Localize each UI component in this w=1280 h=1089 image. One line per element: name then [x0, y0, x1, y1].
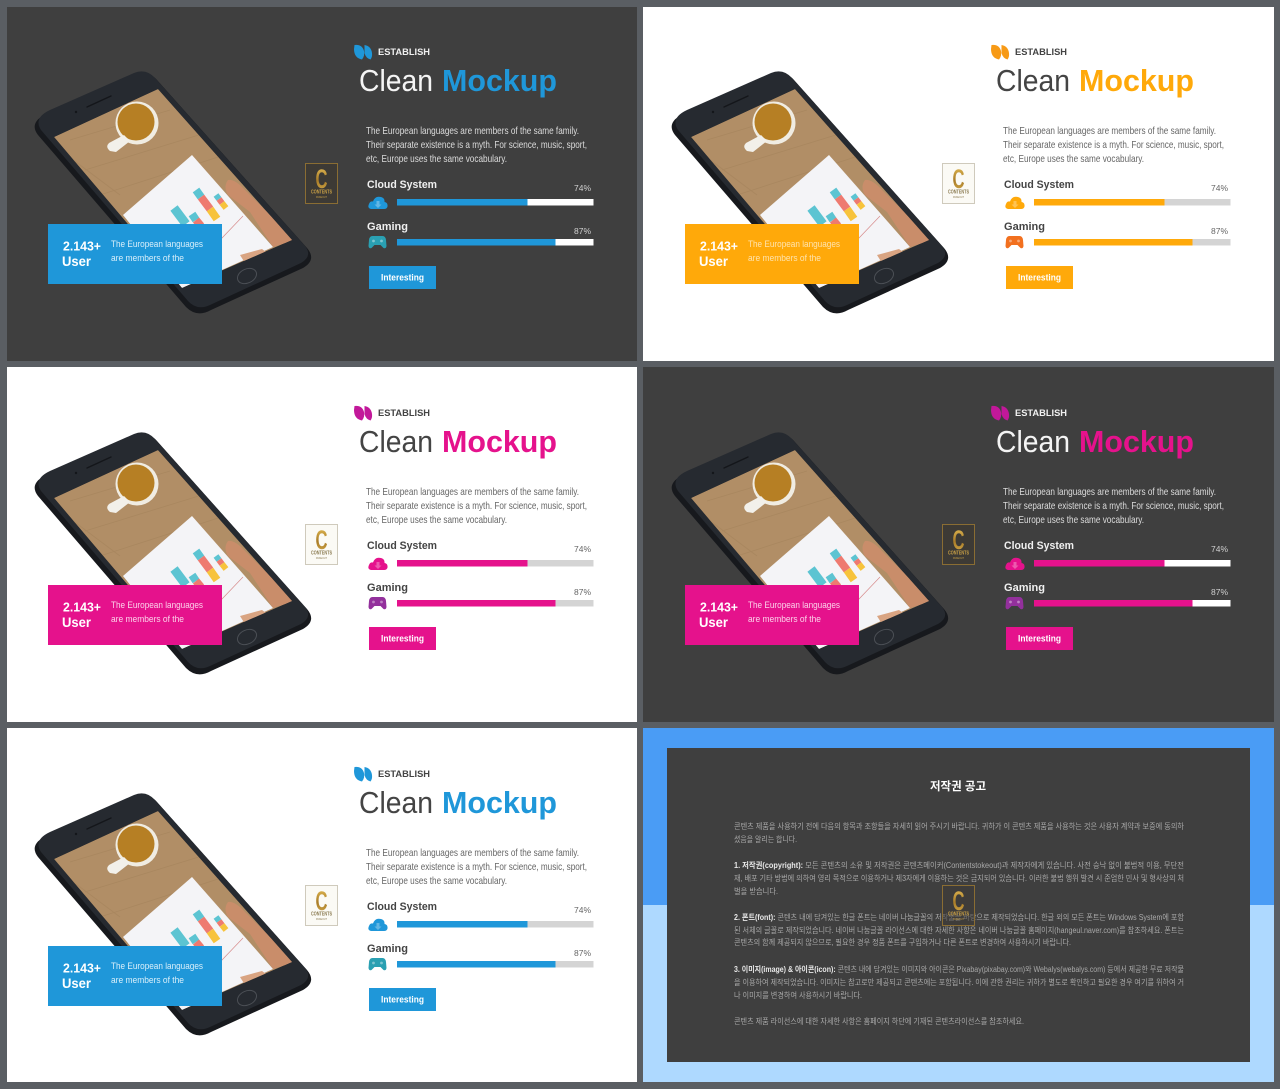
bar: cloud system: 74%	[574, 905, 591, 915]
logo badge: C	[316, 525, 328, 555]
bar: gaming: 87%	[574, 587, 591, 597]
bar: gaming: Gaming	[367, 221, 408, 233]
title	[359, 63, 557, 98]
logo badge: PAKEOUT	[953, 917, 964, 921]
stat card	[48, 224, 222, 284]
icon: leaf logo	[354, 406, 372, 420]
phone mockup	[672, 432, 948, 674]
bar: cloud system	[367, 901, 594, 931]
logo badge	[942, 164, 974, 204]
button	[369, 266, 436, 289]
paragraph: Their separate existence is a myth. For science, music, sport,	[1003, 501, 1224, 512]
bar: cloud system: Cloud System	[1004, 540, 1074, 552]
panel: slide 1 dark blue	[7, 7, 637, 361]
stat card: 2.143+	[700, 238, 738, 254]
logo badge: CONTENTS	[948, 190, 970, 196]
stat card: are members of the	[111, 974, 184, 985]
logo badge: CONTENTS	[311, 912, 333, 918]
title: Mockup	[442, 785, 557, 820]
notice intro: 콘텐츠 제품을 사용하기 전에 다음의 항목과 조항들을 자세히 읽어 주시기 바랍니다. 귀하가 이 콘텐츠 제품을 사용하는 것은 사용자 계약과 보증에 동의하	[734, 821, 1184, 831]
logo badge: PAKEOUT	[316, 917, 327, 921]
logo badge: C	[316, 164, 328, 194]
title	[359, 424, 557, 459]
bar: cloud system	[367, 540, 594, 570]
paragraph: Their separate existence is a myth. For science, music, sport,	[1003, 140, 1224, 151]
stat card: User	[62, 253, 92, 269]
title	[996, 63, 1194, 98]
bar: cloud system: Cloud System	[1004, 179, 1074, 191]
notice section 3: 을 이용하여 제작되었습니다. 이미지는 참고로만 제공되고 콘텐츠에는 포함됩니다. 이에 관한 권리는 귀하가 별도로 확인하고 필요한 경우 여기를 위하여 거	[734, 977, 1184, 987]
bar: gaming	[367, 221, 594, 248]
bar: cloud system	[367, 179, 594, 209]
stat card: The European languages	[748, 238, 840, 249]
title: Mockup	[1079, 63, 1194, 98]
notice section 1: 벌을 받습니다.	[734, 886, 778, 896]
title: Mockup	[442, 63, 557, 98]
panel: slide 4 dark magenta	[643, 367, 1274, 722]
eyebrow: ESTABLISH	[378, 47, 430, 58]
stat card: The European languages	[748, 599, 840, 610]
phone mockup	[35, 432, 311, 674]
logo badge	[306, 164, 338, 204]
stat card: 2.143+	[63, 600, 101, 614]
bar: cloud system: Cloud System	[367, 540, 437, 552]
bar: cloud system: 74%	[1211, 544, 1228, 554]
bar: cloud system: Cloud System	[367, 179, 437, 191]
logo badge: C	[952, 164, 964, 194]
phone mockup	[672, 71, 948, 313]
title: Mockup	[442, 424, 557, 459]
bar: cloud system	[1004, 540, 1230, 570]
paragraph: etc, Europe uses the same vocabulary.	[1003, 154, 1144, 165]
bar: gaming	[1004, 582, 1230, 609]
button: Interesting	[1018, 634, 1061, 644]
icon: leaf logo	[991, 45, 1009, 60]
paragraph: The European languages are members of the same family.	[366, 487, 579, 498]
paragraph	[366, 487, 587, 526]
logo badge: PAKEOUT	[953, 195, 964, 199]
logo badge: C	[316, 886, 328, 916]
notice section 1: 재, 배포 기타 방법에 의하여 영리 목적으로 이용하거나 제3자에게 이용하는 것은 금지되어 있습니다. 이러한 불법 행위 발견 시 준엄한 민사 및 형사상의 처	[734, 873, 1184, 883]
notice section 2: 된 서체의 글꼴로 제작되었습니다. 네이버 나눔글꼴 라이선스에 대한 자세한 사항은 네이버 나눔글꼴 홈페이지(hangeul.naver.com)를 참조하세요. 폰트는	[734, 925, 1184, 935]
button: Interesting	[381, 994, 424, 1004]
notice title: 저작권 공고	[930, 779, 986, 793]
stat card: 2.143+	[63, 960, 101, 976]
button: Interesting	[1018, 272, 1061, 282]
paragraph: etc, Europe uses the same vocabulary.	[366, 515, 507, 526]
logo badge: CONTENTS	[311, 190, 333, 196]
stat card: are members of the	[748, 613, 821, 624]
paragraph: Their separate existence is a myth. For science, music, sport,	[366, 862, 587, 873]
logo badge: C	[952, 886, 964, 916]
stat card: The European languages	[111, 238, 203, 249]
logo badge	[306, 524, 338, 564]
bar: cloud system: Cloud System	[367, 901, 437, 913]
stat card	[685, 585, 859, 645]
bar: gaming	[367, 943, 594, 970]
icon: leaf logo	[354, 45, 372, 60]
paragraph: Their separate existence is a myth. For science, music, sport,	[366, 501, 587, 512]
notice section 3: 3. 이미지(image) & 아이콘(icon): 콘텐츠 내에 담겨있는 이미지와 아이콘은 Pixabay(pixabay.com)와 Webalys(webalys.com) 등에서 제공한 무료 저작물	[734, 964, 1184, 974]
paragraph: The European languages are members of the same family.	[366, 848, 579, 859]
eyebrow: ESTABLISH	[1015, 408, 1067, 419]
button: Interesting	[381, 634, 424, 644]
stat card: 2.143+	[700, 600, 738, 614]
logo badge: PAKEOUT	[316, 195, 327, 199]
stat card	[48, 946, 222, 1006]
title	[359, 785, 557, 820]
button	[369, 627, 436, 650]
bar: gaming: Gaming	[1004, 582, 1045, 594]
bar: gaming: 87%	[1211, 226, 1228, 236]
phone mockup	[35, 71, 311, 313]
paragraph	[366, 126, 587, 165]
title: Clean	[359, 785, 433, 820]
panel: slide 2 white orange	[643, 7, 1274, 361]
bar: cloud system	[1004, 179, 1230, 209]
logo badge	[306, 886, 338, 926]
stat card: User	[62, 975, 92, 991]
stat card: are members of the	[748, 252, 821, 263]
bar: gaming: Gaming	[1004, 221, 1045, 233]
phone mockup	[35, 793, 311, 1035]
stat card: 2.143+	[63, 238, 101, 254]
notice section 3	[734, 964, 1184, 1000]
bar: gaming: 87%	[574, 226, 591, 236]
stat card: are members of the	[111, 613, 184, 624]
bar: cloud system: 74%	[574, 544, 591, 554]
logo badge	[942, 886, 974, 926]
stat card	[685, 224, 859, 284]
title	[996, 424, 1194, 459]
paragraph	[366, 848, 587, 887]
bar: cloud system: 74%	[1211, 183, 1228, 193]
bar: gaming: 87%	[1211, 587, 1228, 597]
paragraph: The European languages are members of the same family.	[1003, 126, 1216, 137]
logo badge	[942, 524, 974, 564]
eyebrow: ESTABLISH	[1015, 47, 1067, 58]
paragraph: The European languages are members of the same family.	[1003, 487, 1216, 498]
stat card: User	[62, 614, 92, 630]
bar: gaming: Gaming	[367, 943, 408, 955]
panel: copyright notice slide	[643, 728, 1274, 1082]
bar: gaming: Gaming	[367, 582, 408, 594]
panel: slide 3 white magenta	[7, 367, 637, 722]
button: Interesting	[381, 272, 424, 282]
stat card: User	[699, 614, 729, 630]
paragraph: etc, Europe uses the same vocabulary.	[1003, 515, 1144, 526]
title: Clean	[996, 424, 1070, 459]
notice section 2: 콘텐츠의 함께 제공되지 않으므로, 필요한 경우 정품 폰트를 구입하거나 다른 폰트로 변경하여 사용하시기 바랍니다.	[734, 937, 1071, 947]
paragraph: Their separate existence is a myth. For science, music, sport,	[366, 140, 587, 151]
eyebrow: ESTABLISH	[378, 408, 430, 419]
panel: slide 5 white blue	[7, 728, 637, 1082]
eyebrow: ESTABLISH	[378, 769, 430, 780]
notice section 2: 2. 폰트(font): 콘텐츠 내에 담겨있는 한글 폰트는 네이버 나눔글꼴의 저작물을 바탕으로 제작되었습니다. 한글 외의 모든 폰트는 Windows System에 포함	[734, 912, 1184, 922]
button	[1006, 627, 1073, 650]
icon: leaf logo	[354, 767, 372, 782]
button	[369, 988, 436, 1011]
stat card	[48, 585, 222, 645]
notice intro: 셨음을 알리는 합니다.	[734, 834, 797, 844]
logo badge: C	[952, 525, 964, 555]
title: Clean	[359, 63, 433, 98]
logo badge: PAKEOUT	[953, 556, 964, 560]
icon: leaf logo	[991, 406, 1009, 420]
bar: gaming	[1004, 221, 1230, 248]
notice footer: 콘텐츠 제품 라이선스에 대한 자세한 사항은 홈페이지 하단에 기재된 콘텐츠라이선스를 참조하세요.	[734, 1016, 1024, 1026]
stat card: The European languages	[111, 960, 203, 971]
notice section 1	[734, 860, 1184, 896]
paragraph	[1003, 126, 1224, 165]
button	[1006, 266, 1073, 289]
stat card: The European languages	[111, 599, 203, 610]
logo badge: CONTENTS	[311, 550, 333, 556]
notice section 1: 1. 저작권(copyright): 모든 콘텐츠의 소유 및 저작권은 콘텐츠메이커(Contentstokeout)과 제작자에게 있습니다. 사전 승낙 없이 불법적 이용, 무단전	[734, 860, 1184, 870]
logo badge: PAKEOUT	[316, 556, 327, 560]
paragraph: etc, Europe uses the same vocabulary.	[366, 154, 507, 165]
bar: gaming: 87%	[574, 948, 591, 958]
notice section 2	[734, 912, 1184, 947]
notice intro	[734, 821, 1184, 844]
stat card: User	[699, 253, 729, 269]
logo badge: CONTENTS	[948, 912, 970, 918]
paragraph: etc, Europe uses the same vocabulary.	[366, 876, 507, 887]
notice section 3: 나 이미지를 변경하여 사용하시기 바랍니다.	[734, 990, 862, 1000]
title: Mockup	[1079, 424, 1194, 459]
paragraph: The European languages are members of the same family.	[366, 126, 579, 137]
title: Clean	[996, 63, 1070, 98]
bar: cloud system: 74%	[574, 183, 591, 193]
stat card: are members of the	[111, 252, 184, 263]
paragraph	[1003, 487, 1224, 526]
title: Clean	[359, 424, 433, 459]
bar: gaming	[367, 582, 594, 609]
logo badge: CONTENTS	[948, 550, 970, 556]
